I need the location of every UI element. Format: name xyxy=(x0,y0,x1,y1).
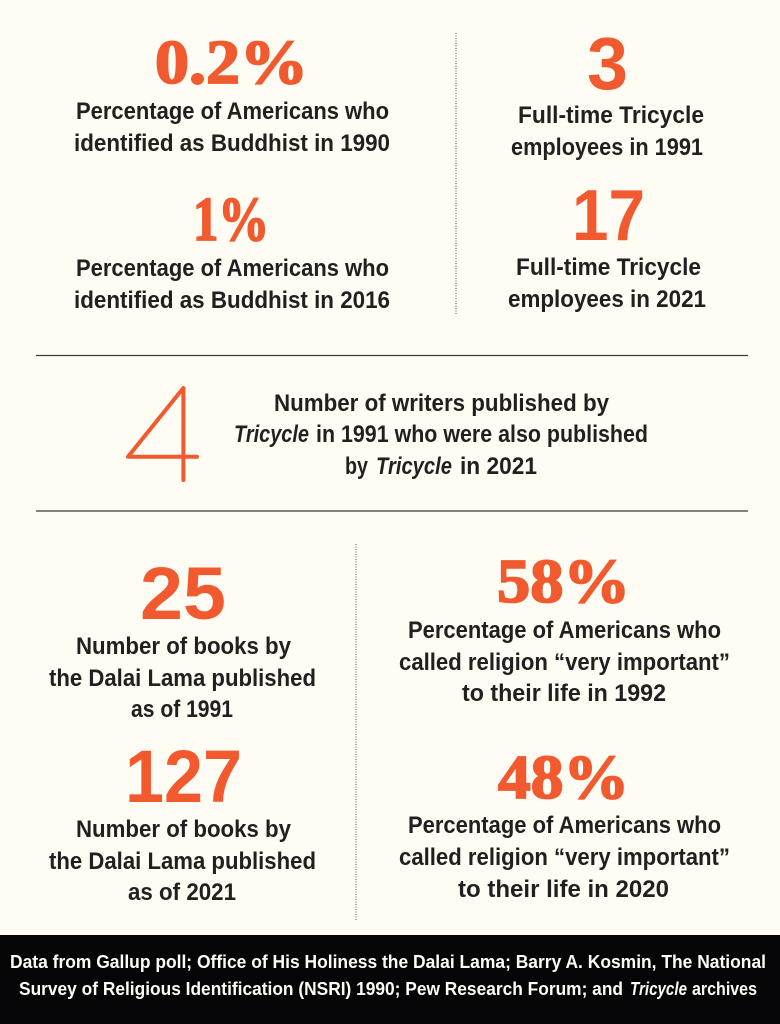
label: employees 2021: employees in 2021 xyxy=(508,286,706,313)
stat: 1% Buddhist in 2016 xyxy=(74,186,390,314)
number: 3: 3 xyxy=(587,22,628,105)
label: books 2021 xyxy=(49,816,316,906)
label: writers published: Number of writers published by xyxy=(274,390,610,417)
stat: 48% religion 2020 xyxy=(399,744,730,903)
number: 48%: 48% xyxy=(498,744,629,812)
label: Buddhist 1990: identified as Buddhist in 1990 xyxy=(74,130,390,157)
label: Buddhist 1990: Percentage of Americans who xyxy=(76,98,389,125)
stat: 17 employees in 2021 xyxy=(508,176,706,313)
footer: sources xyxy=(0,935,780,1024)
number: 17: 17 xyxy=(572,176,645,256)
label: Buddhist 2016: identified as Buddhist in 2016 xyxy=(74,287,390,314)
stat: 4 writers xyxy=(127,388,648,481)
label: Buddhist 2016 xyxy=(74,255,390,314)
footer: sources: archives xyxy=(692,978,757,999)
number: 25: 25 xyxy=(140,552,226,635)
number: 58%: 58% xyxy=(497,548,630,616)
label: writers published xyxy=(234,390,648,480)
label: Buddhist 2016: Percentage of Americans who xyxy=(76,255,389,282)
label: religion 1992 xyxy=(399,617,730,707)
label: writers published: by xyxy=(345,453,369,480)
footer: sources: Tricycle xyxy=(630,978,687,999)
number: 0.2%: 0.2% xyxy=(155,29,308,97)
label: religion 2020 xyxy=(399,812,730,903)
label: writers published: Tricycle xyxy=(234,421,309,448)
label: books 1991: Number of books by xyxy=(76,633,292,660)
stat: 58% religion 1992 xyxy=(399,548,730,707)
number: 127: 127 xyxy=(125,735,242,818)
label: writers published: Tricycle xyxy=(376,453,452,480)
label: employees 1991 xyxy=(511,102,704,161)
stat: 25 books xyxy=(49,552,316,723)
label: books 2021: the Dalai Lama published xyxy=(49,848,316,875)
footer: sources: Survey of Religious Identification (NSRI) 1990; Pew Research Forum; and xyxy=(19,978,623,999)
label: employees 2021 xyxy=(508,254,706,313)
number: 1%: 1% xyxy=(193,186,269,254)
stat: 127 books xyxy=(49,735,316,906)
label: books 1991: the Dalai Lama published xyxy=(49,665,316,692)
number: 4: 4 xyxy=(127,479,128,481)
label: religion 2020: to their life in 2020 xyxy=(458,876,669,903)
label: religion 1992: to their life in 1992 xyxy=(462,680,666,707)
label: employees 2021: Full-time Tricycle xyxy=(516,254,701,281)
label: books 1991: as of 1991 xyxy=(131,696,233,723)
label: religion 2020: called religion “very important” xyxy=(399,844,730,871)
stat: 3 employees in 1991 xyxy=(511,22,704,161)
label: employees 1991: employees in 1991 xyxy=(511,134,703,161)
stat: 0.2% Buddhist in 1990 xyxy=(74,29,390,157)
label: writers published: in 2021 xyxy=(460,453,537,480)
label: employees 1991: Full-time Tricycle xyxy=(518,102,704,129)
label: religion 1992: Percentage of Americans who xyxy=(408,617,721,644)
label: books 2021: as of 2021 xyxy=(128,879,236,906)
label: religion 1992: called religion “very important” xyxy=(399,649,730,676)
label: books 1991 xyxy=(49,633,316,723)
label: Buddhist 1990 xyxy=(74,98,390,157)
label: books 2021: Number of books by xyxy=(76,816,292,843)
number: 4 xyxy=(127,388,197,481)
label: religion 2020: Percentage of Americans who xyxy=(408,812,721,839)
label: writers published: in 1991 who were also published xyxy=(316,421,648,448)
